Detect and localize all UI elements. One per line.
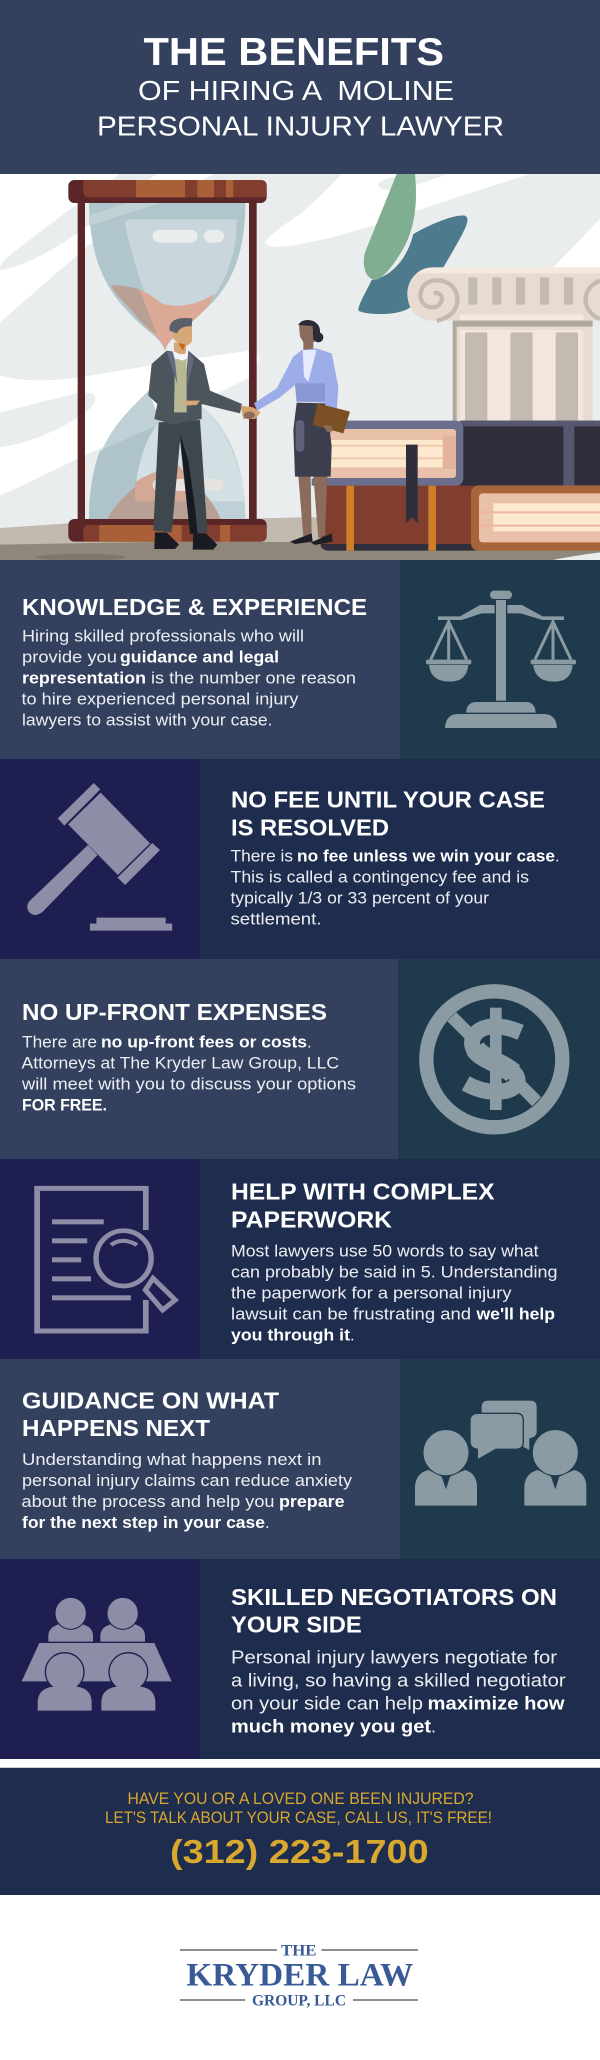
panel: no up-front expenses (0, 959, 600, 1159)
body text: Most lawyers use 50 words to say what (231, 1243, 539, 1261)
panel: guidance on what happens next (0, 1359, 600, 1559)
body text: Understanding what happens next in (22, 1451, 322, 1469)
heading (231, 1584, 557, 1638)
body text: on your side can help (231, 1694, 423, 1714)
body text: typically 1/3 or 33 percent of your (230, 890, 490, 908)
body text: . (307, 1034, 312, 1052)
subtitle line two: PERSONAL INJURY LAWYER (97, 110, 504, 142)
body text: about the process and help you (22, 1493, 274, 1511)
logo: the kryder law group: KRYDER LAW (186, 1958, 413, 1994)
heading: IS RESOLVED (231, 814, 389, 840)
leaves (358, 174, 467, 314)
heading (231, 786, 545, 840)
body text: lawsuit can be frustrating and (231, 1306, 471, 1324)
body text: can probably be said in 5. Understanding (231, 1264, 558, 1282)
call to action banner (0, 1768, 600, 1895)
icon: two people talking (415, 1401, 586, 1506)
heading: GUIDANCE ON WHAT (22, 1387, 280, 1413)
invitation line: LET'S TALK ABOUT YOUR CASE, CALL US, IT'S FREE! (105, 1809, 492, 1827)
heading: HELP WITH COMPLEX (231, 1178, 495, 1204)
body text: much money you get (231, 1717, 431, 1737)
icon: document with magnifier (37, 1188, 175, 1331)
body text: to hire experienced personal injury (22, 691, 299, 709)
body text: FOR FREE. (22, 1097, 107, 1115)
panel: no fee until resolved (0, 759, 600, 959)
body text: prepare (279, 1493, 344, 1511)
ground (0, 517, 600, 561)
logo: the kryder law group (180, 1943, 418, 2010)
header banner (0, 0, 600, 174)
icon: people at table (22, 1597, 172, 1711)
icon: gavel (27, 783, 172, 931)
body text: . (350, 1327, 355, 1345)
title: the benefits: THE BENEFITS (144, 31, 444, 74)
logo: the kryder law group: GROUP, LLC (252, 1993, 346, 2010)
body text: Personal injury lawyers negotiate for (231, 1647, 557, 1667)
body text (231, 1243, 558, 1345)
body text: for the next step in your case (22, 1514, 265, 1532)
body text: There are (22, 1034, 97, 1052)
body text: a living, so having a skilled negotiator (231, 1671, 566, 1691)
panel: help with complex paperwork (0, 1159, 600, 1359)
heading (231, 1178, 495, 1232)
body text: the paperwork for a personal injury (231, 1285, 512, 1303)
body text: we'll help (475, 1306, 555, 1324)
heading: YOUR SIDE (231, 1612, 362, 1638)
body text: Attorneys at The Kryder Law Group, LLC (22, 1055, 339, 1073)
body text: is the number one reason (151, 670, 356, 688)
body text: will meet with you to discuss your options (21, 1076, 356, 1094)
businesswoman (254, 320, 350, 545)
heading (22, 1387, 280, 1441)
logo: the kryder law group: THE (281, 1943, 316, 1960)
hourglass (68, 180, 267, 542)
icon: no dollar sign (426, 991, 562, 1127)
hero illustration (0, 174, 600, 561)
heading: HAPPENS NEXT (22, 1415, 211, 1441)
heading: NO UP-FRONT EXPENSES (22, 999, 327, 1025)
body text: . (265, 1514, 270, 1532)
heading: NO FEE UNTIL YOUR CASE (231, 786, 545, 812)
body text (22, 1451, 353, 1532)
body text: There is (230, 848, 293, 866)
body text (230, 848, 560, 929)
body text (231, 1647, 566, 1737)
body text: . (555, 848, 560, 866)
body text (22, 628, 356, 730)
body text: . (431, 1717, 436, 1737)
heading: KNOWLEDGE & EXPERIENCE (22, 594, 367, 620)
businessman (148, 318, 261, 550)
body text: lawyers to assist with your case. (22, 712, 272, 730)
phone number: (312) 223-1700 (170, 1833, 429, 1870)
icon: scales of justice (426, 591, 576, 728)
body text: provide you (22, 649, 117, 667)
books (312, 421, 600, 551)
heading: SKILLED NEGOTIATORS ON (231, 1584, 557, 1610)
body text: no up-front fees or costs (101, 1034, 307, 1052)
body text (21, 1034, 356, 1115)
question line: HAVE YOU OR A LOVED ONE BEEN INJURED? (128, 1790, 474, 1808)
body text: maximize how (428, 1694, 566, 1714)
heading: PAPERWORK (231, 1206, 392, 1232)
panel: skilled negotiators (0, 1559, 600, 1759)
body text: guidance and legal (120, 649, 279, 667)
body text: Hiring skilled professionals who will (22, 628, 304, 646)
panel: knowledge and experience (0, 560, 600, 759)
body text: personal injury claims can reduce anxiety (22, 1472, 353, 1490)
body text: you through it (231, 1327, 351, 1345)
body text: settlement. (230, 911, 322, 929)
body text: no fee unless we win your case (297, 848, 555, 866)
body text: This is called a contingency fee and is (230, 869, 529, 887)
greek column (407, 267, 600, 422)
subtitle line one: OF HIRING A MOLINE (138, 75, 454, 106)
body text: representation (22, 670, 146, 688)
